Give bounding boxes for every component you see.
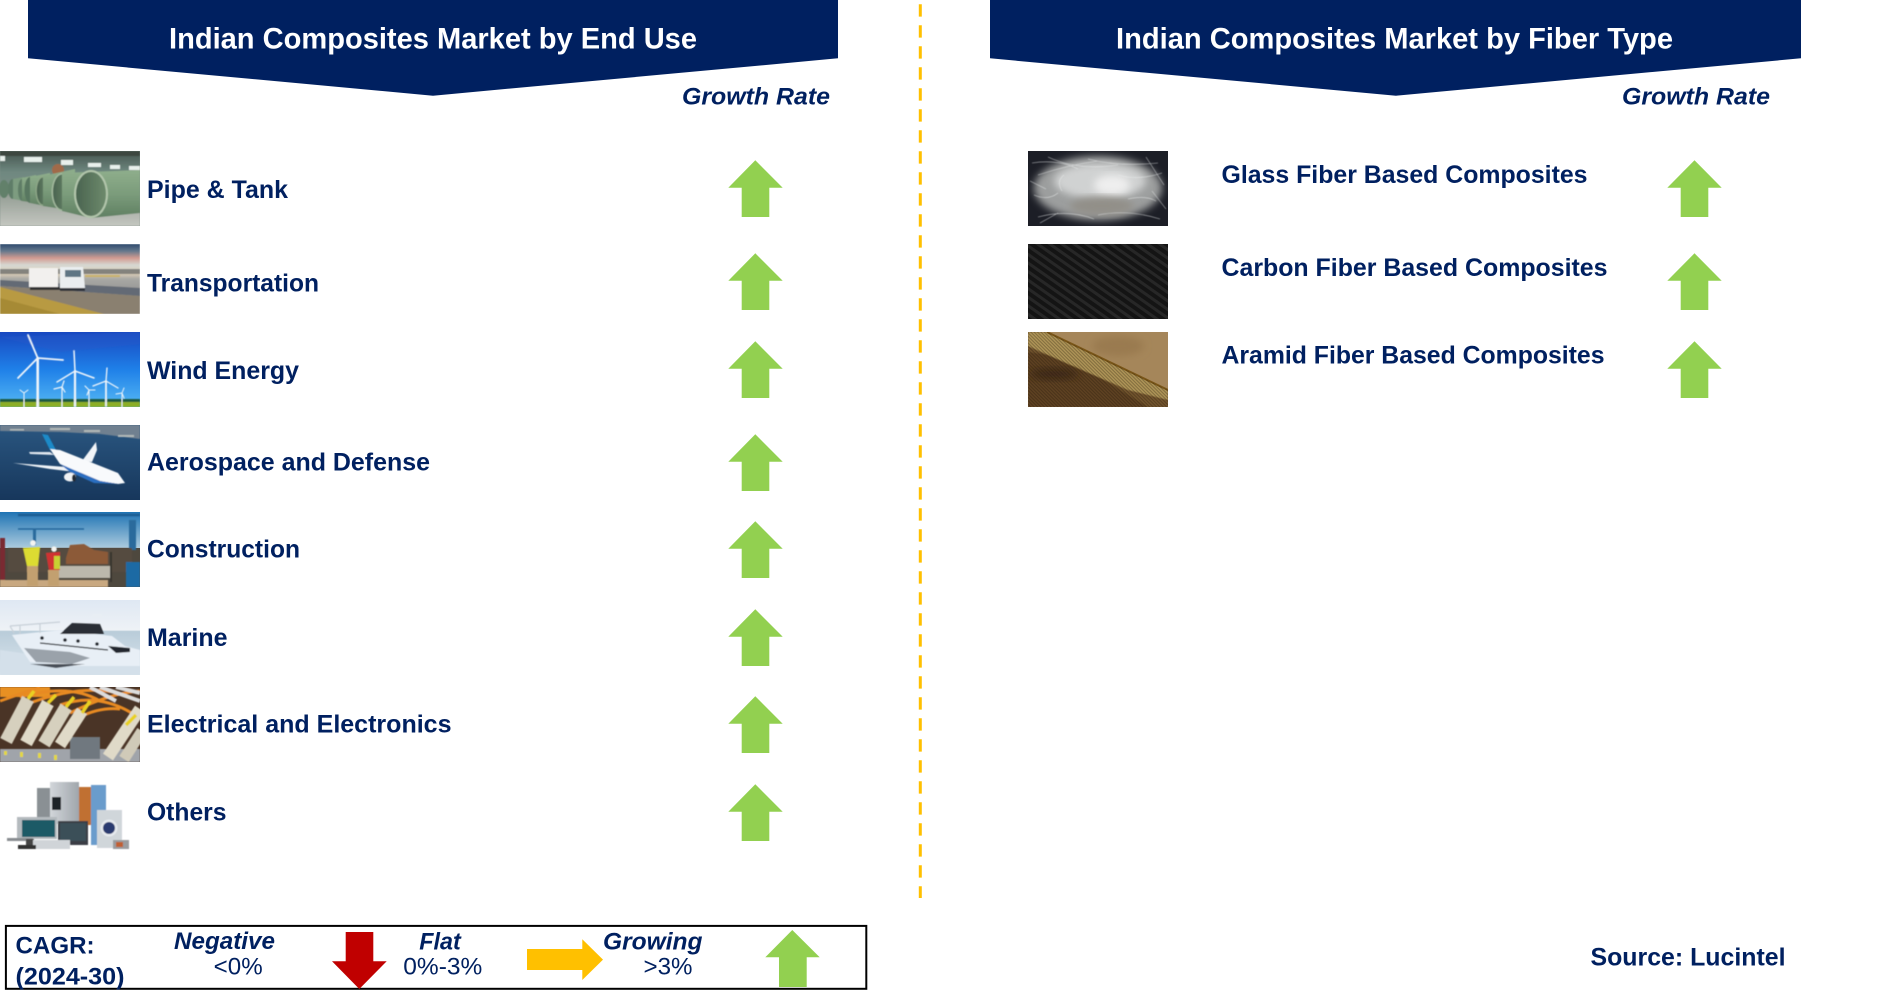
photo: wind turbines: [0, 332, 140, 407]
label: Aramid Fiber: Aramid Fiber Based Composites: [1222, 342, 1604, 370]
legend item: flat: [403, 928, 482, 980]
legend frame: [6, 926, 866, 989]
label: Pipe and Tank: Pipe & Tank: [147, 176, 288, 204]
panel: market by fiber type: [990, 0, 1801, 407]
photo: glass fiber strands: [1028, 151, 1168, 226]
icon: orange right arrow: [527, 939, 603, 980]
icon: green up arrow: [765, 930, 820, 987]
icon: growth arrow up: [728, 609, 783, 666]
legend item: growing: Growing: [603, 928, 703, 955]
photo: carbon fiber weave: [1028, 244, 1168, 319]
label: Transportation: Transportation: [147, 270, 319, 298]
legend item: flat: 0%-3%: [403, 953, 482, 980]
column heading: growth rate: Growth Rate: [1622, 84, 1770, 110]
row: Marine: [0, 600, 783, 675]
label: Electrical and Electronics: Electrical and Electronics: [147, 711, 452, 739]
row: Glass Fiber: [1028, 151, 1722, 226]
legend item: negative: <0%: [214, 953, 263, 980]
icon: growth arrow up: [1667, 160, 1722, 217]
legend item: growing: [603, 928, 703, 980]
photo: construction site with workers: [0, 512, 140, 587]
row: Carbon Fiber: [1028, 244, 1722, 319]
icon: growth arrow up: [728, 784, 783, 841]
photo: truck on highway: [0, 244, 140, 314]
row: Aerospace and Defense: [0, 425, 783, 500]
icon: growth arrow up: [728, 341, 783, 398]
icon: growth arrow up: [1667, 341, 1722, 398]
row: Aramid Fiber: [1028, 332, 1722, 407]
icon: growth arrow up: [728, 696, 783, 753]
legend title: CAGR:: [16, 932, 95, 959]
heading banner: end use: Indian Composites Market by End Use: [169, 22, 697, 56]
legend item: growing: >3%: [644, 953, 692, 980]
legend item: negative: [174, 928, 275, 980]
panel: market by end use: [0, 0, 838, 849]
row: Construction: [0, 512, 783, 587]
heading banner: fiber type: Indian Composites Market by Fiber Type: [1116, 22, 1673, 56]
label: Wind Energy: Wind Energy: [147, 357, 299, 385]
label: Carbon Fiber: Carbon Fiber Based Composites: [1222, 254, 1608, 282]
label: Glass Fiber: Glass Fiber Based Composites: [1222, 161, 1588, 189]
row: Wind Energy: [0, 332, 783, 408]
row: Pipe and Tank: [0, 151, 783, 226]
legend item: negative: Negative: [174, 928, 275, 955]
photo: green composite pipes: [0, 151, 140, 226]
divider: dashed orange centre line: [919, 4, 922, 898]
photo: airliner over sea: [0, 425, 140, 500]
label: Construction: Construction: [147, 536, 300, 564]
row: Electrical and Electronics: [0, 687, 783, 762]
label: Aerospace and Defense: Aerospace and Defense: [147, 449, 430, 477]
legend title: (2024-30): [16, 963, 124, 990]
legend: CAGR key: [6, 926, 866, 990]
row: Transportation: [0, 244, 783, 319]
photo: household appliances: [6, 782, 130, 850]
icon: red down arrow: [332, 932, 387, 989]
photo: motor yacht: [0, 600, 140, 675]
source note: Source: Lucintel: [1590, 944, 1786, 972]
icon: growth arrow up: [728, 160, 783, 217]
legend title: [16, 932, 124, 990]
icon: growth arrow up: [728, 521, 783, 578]
row: Others: [7, 782, 783, 849]
heading banner: fiber type: [990, 0, 1801, 96]
heading banner: end use: [28, 0, 838, 96]
icon: growth arrow up: [728, 434, 783, 491]
label: Marine: Marine: [147, 624, 228, 652]
legend item: flat: Flat: [419, 928, 461, 956]
column heading: growth rate: Growth Rate: [682, 84, 830, 110]
photo: fibre-optic connectors: [0, 687, 140, 762]
icon: growth arrow up: [728, 253, 783, 310]
photo: aramid fiber fabric: [1028, 332, 1168, 407]
label: Others: Others: [147, 799, 226, 827]
icon: growth arrow up: [1667, 253, 1722, 310]
